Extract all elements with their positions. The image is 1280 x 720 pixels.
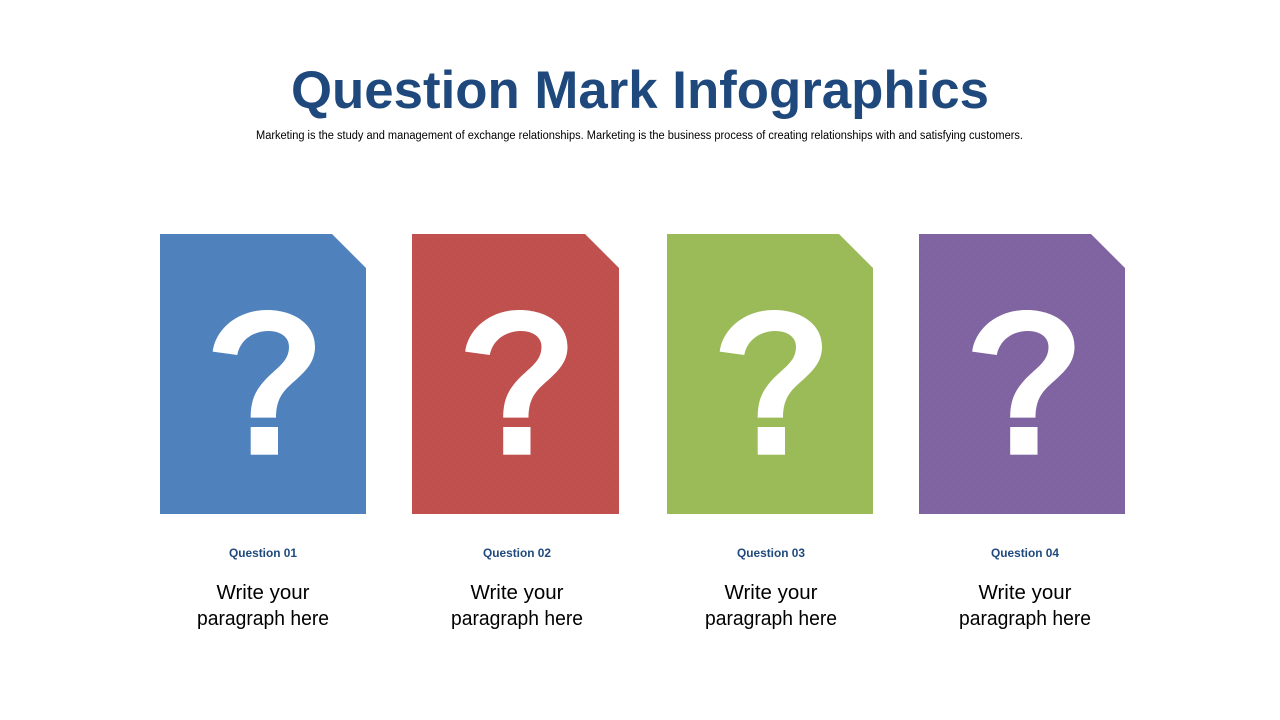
icon: question mark xyxy=(213,310,315,455)
card: purple document xyxy=(919,234,1125,514)
heading: question 01: Question 01 xyxy=(229,546,297,560)
card: green document xyxy=(667,234,873,514)
title: Question Mark Infographics xyxy=(291,61,989,120)
heading: question 03: Question 03 xyxy=(737,546,805,560)
text block: paragraph 03: paragraph here xyxy=(705,608,837,630)
icon: question mark xyxy=(720,310,822,455)
card: red document xyxy=(412,234,619,514)
text block: paragraph 04: Write your xyxy=(978,582,1072,604)
text block: paragraph 01: Write your xyxy=(216,582,310,604)
text block: paragraph 03: Write your xyxy=(724,582,818,604)
text block: paragraph 01: paragraph here xyxy=(197,608,329,630)
panel: question 04 xyxy=(919,234,1125,630)
icon: question mark xyxy=(465,310,567,455)
subtitle: Marketing is the study and management of exchange relationships. Marketing is the business process of creating relationships with and satisfying customers. xyxy=(256,130,1023,142)
card: blue document xyxy=(160,234,366,514)
heading: question 04: Question 04 xyxy=(991,546,1059,560)
panel: question 02 xyxy=(412,234,619,630)
text block: paragraph 02: Write your xyxy=(470,582,564,604)
heading: question 02: Question 02 xyxy=(483,546,551,560)
panel: question 03 xyxy=(667,234,873,630)
icon: question mark xyxy=(972,310,1074,455)
text block: paragraph 04: paragraph here xyxy=(959,608,1091,630)
panel: question 01 xyxy=(160,234,366,630)
text block: paragraph 02: paragraph here xyxy=(451,608,583,630)
